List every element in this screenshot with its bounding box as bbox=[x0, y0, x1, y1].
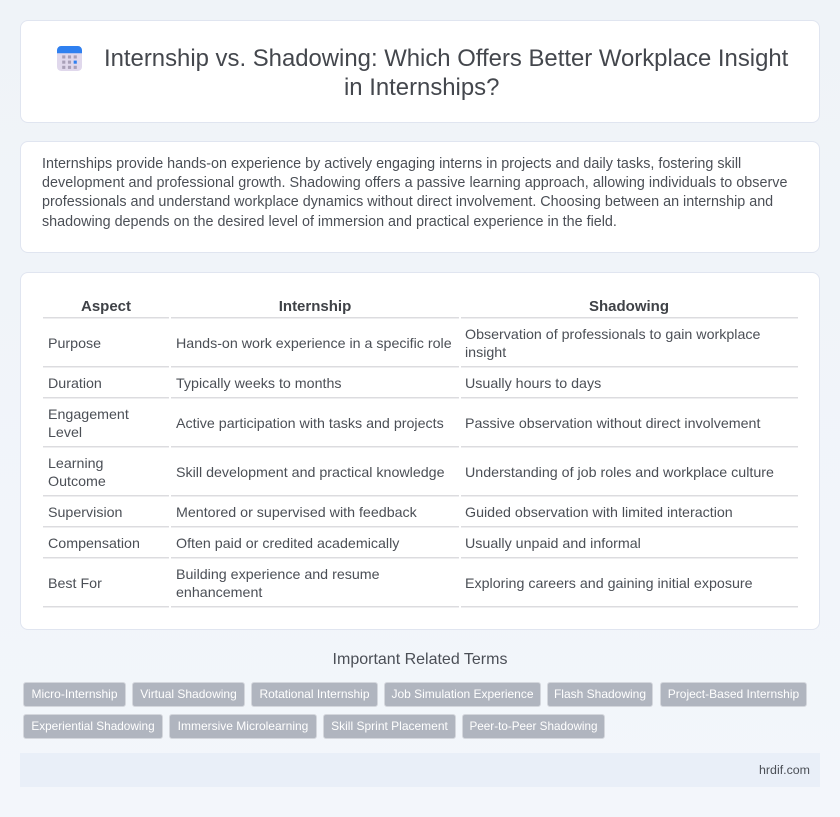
related term tags: Project-Based Internship bbox=[668, 687, 799, 701]
related term tags: Flash Shadowing bbox=[554, 687, 646, 701]
row: duration: Duration bbox=[48, 376, 102, 392]
row: compensation bbox=[48, 536, 641, 552]
row: purpose: Hands-on work experience in a specific role bbox=[176, 336, 452, 352]
table header: Shadowing bbox=[589, 298, 669, 315]
row: supervision: Guided observation with limited interaction bbox=[465, 505, 733, 521]
related term tags: Experiential Shadowing bbox=[31, 719, 155, 733]
row: compensation: Usually unpaid and informal bbox=[465, 536, 641, 552]
table header: Internship bbox=[279, 298, 351, 315]
icon: calendar bbox=[57, 46, 82, 71]
row: engagement level: Level bbox=[48, 425, 82, 441]
intro text: shadowing depends on the desired level of immersion and practical experience in the field. bbox=[42, 214, 617, 230]
intro text: professionals and understand workplace dynamics without direct involvement. Choosing between an internship and bbox=[42, 194, 773, 210]
row: supervision: Supervision bbox=[48, 505, 122, 521]
row: supervision bbox=[48, 505, 733, 521]
related term tags: Immersive Microlearning bbox=[178, 719, 308, 733]
footer source: hrdif.com bbox=[759, 763, 810, 777]
title bbox=[104, 45, 788, 101]
row: duration bbox=[48, 376, 601, 392]
row: purpose: Purpose bbox=[48, 336, 101, 352]
row: engagement level: Passive observation without direct involvement bbox=[465, 416, 760, 432]
row: engagement level: Active participation with tasks and projects bbox=[176, 416, 444, 432]
related term tags: Job Simulation Experience bbox=[391, 687, 534, 701]
related term tags: Virtual Shadowing bbox=[140, 687, 237, 701]
row: engagement level bbox=[48, 407, 760, 441]
panel: comparison table bbox=[20, 272, 820, 630]
row: compensation: Often paid or credited academically bbox=[176, 536, 399, 552]
title: Internship vs. Shadowing: Which Offers Better Workplace Insight bbox=[104, 45, 788, 72]
heading: related terms: Important Related Terms bbox=[333, 651, 507, 668]
row: compensation: Compensation bbox=[48, 536, 140, 552]
row: purpose: Observation of professionals to gain workplace bbox=[465, 327, 760, 343]
row: engagement level: Engagement bbox=[48, 407, 129, 423]
intro text: development and professional growth. Shadowing offers a passive learning approach, allowing individuals to observe bbox=[42, 175, 788, 191]
related term tags bbox=[23, 682, 807, 739]
related term tags: Rotational Internship bbox=[259, 687, 370, 701]
row: learning outcome: Outcome bbox=[48, 474, 106, 490]
row: supervision: Mentored or supervised with feedback bbox=[176, 505, 417, 521]
row: learning outcome: Learning bbox=[48, 456, 103, 472]
table header bbox=[81, 298, 669, 315]
row: best for bbox=[48, 567, 753, 601]
row: duration: Typically weeks to months bbox=[176, 376, 342, 392]
panel: header bbox=[20, 20, 820, 123]
row: learning outcome: Skill development and practical knowledge bbox=[176, 465, 445, 481]
row: best for: enhancement bbox=[176, 585, 262, 601]
panel: introduction bbox=[20, 141, 820, 253]
intro text: Internships provide hands-on experience by actively engaging interns in projects and daily tasks, fostering skill bbox=[42, 156, 741, 172]
row: purpose bbox=[48, 327, 760, 361]
related term tags: Peer-to-Peer Shadowing bbox=[470, 720, 598, 733]
row: best for: Best For bbox=[48, 576, 102, 592]
row: best for: Exploring careers and gaining initial exposure bbox=[465, 576, 753, 592]
related term tags: Micro-Internship bbox=[31, 687, 118, 701]
related term tags: Skill Sprint Placement bbox=[331, 719, 448, 733]
row: duration: Usually hours to days bbox=[465, 376, 601, 392]
row: learning outcome bbox=[48, 456, 774, 490]
intro text bbox=[42, 156, 788, 230]
row: best for: Building experience and resume bbox=[176, 567, 380, 583]
title: in Internships? bbox=[344, 74, 499, 101]
row: learning outcome: Understanding of job roles and workplace culture bbox=[465, 465, 774, 481]
table header: Aspect bbox=[81, 298, 131, 315]
row: purpose: insight bbox=[465, 345, 506, 361]
footer bbox=[20, 753, 820, 787]
